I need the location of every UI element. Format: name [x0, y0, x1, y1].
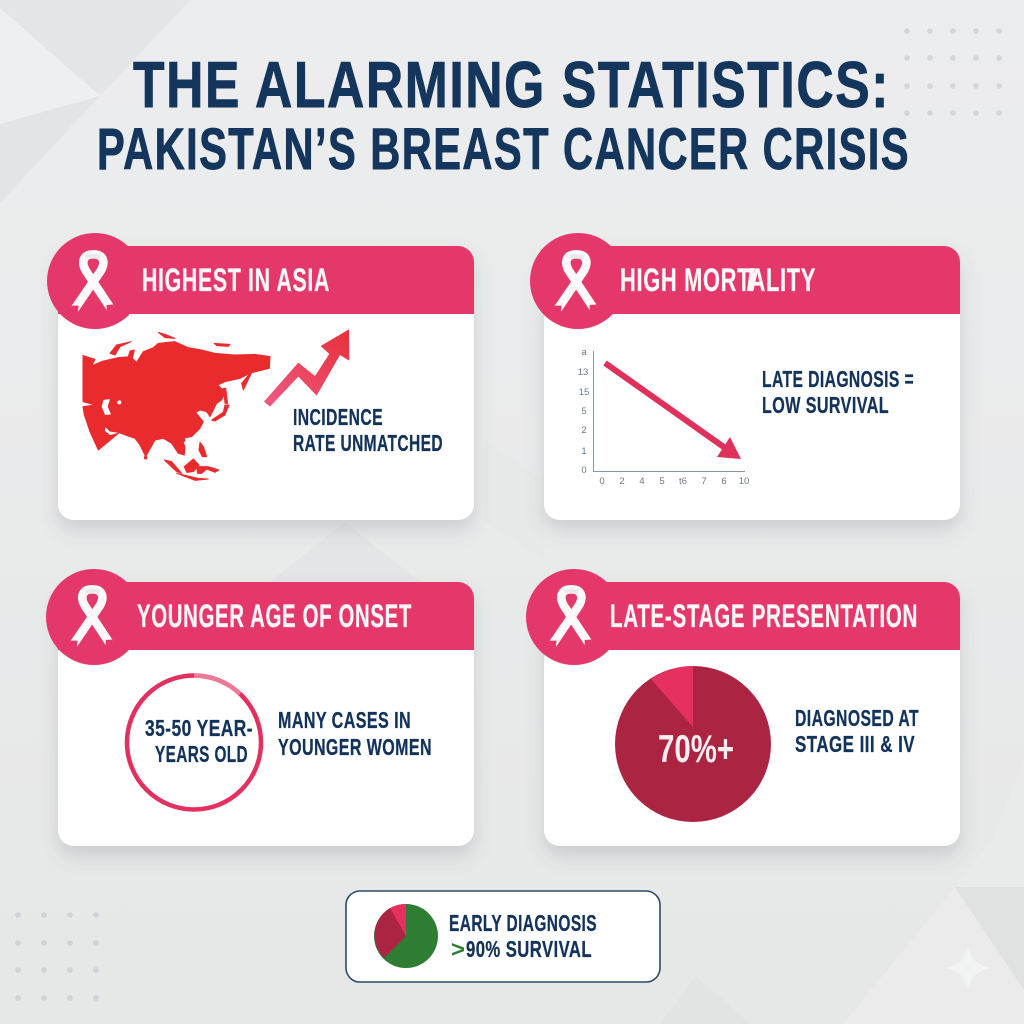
card body: [58, 582, 474, 846]
heading: [620, 262, 816, 298]
age ring: 35-50 YEAR-: [145, 715, 253, 741]
line chart: 5: [659, 476, 665, 487]
line chart: t6: [679, 476, 687, 487]
card body: [58, 246, 474, 520]
text: younger women: [278, 707, 432, 760]
callout text: >: [451, 936, 465, 962]
line chart: 1: [581, 446, 587, 457]
callout: early diagnosis: [346, 891, 660, 982]
text: younger women: MANY CASES IN: [278, 707, 411, 733]
text: late diagnosis: LOW SURVIVAL: [762, 392, 889, 418]
card header: [58, 582, 474, 650]
age ring: YEARS OLD: [155, 741, 248, 767]
text: incidence: [293, 404, 443, 456]
pie chart 70%: [615, 666, 771, 822]
age ring: [127, 676, 261, 810]
panel: younger age of onset: [46, 569, 474, 846]
card header: [58, 246, 474, 314]
badge with ribbon: [46, 569, 142, 665]
badge with ribbon: [530, 233, 626, 329]
text: younger women: YOUNGER WOMEN: [278, 734, 432, 760]
map of Asia: [83, 332, 270, 480]
pie chart 70%: 70%+: [658, 728, 734, 771]
text: stage: [795, 705, 919, 757]
rising arrow: [264, 329, 349, 407]
falling arrow: [605, 363, 741, 459]
callout text: [449, 910, 597, 962]
line chart: 2: [619, 476, 625, 487]
line chart: 2: [581, 425, 587, 436]
dots: top right: [904, 28, 1002, 116]
text: incidence: INCIDENCE: [293, 404, 383, 430]
text: incidence: RATE UNMATCHED: [293, 430, 443, 456]
line chart: 0: [599, 476, 605, 487]
card header: [544, 582, 960, 650]
line chart: 7: [701, 476, 707, 487]
panel: high mortality: [530, 233, 960, 520]
callout text: EARLY DIAGNOSIS: [449, 910, 597, 936]
sparkle: [944, 944, 992, 992]
badge with ribbon: [47, 233, 143, 329]
panel: highest in Asia: [47, 233, 474, 520]
heading: YOUNGER AGE OF ONSET: [137, 598, 412, 634]
line chart: 4: [639, 476, 645, 487]
mini pie chart: [374, 904, 438, 968]
line chart: 13: [578, 367, 588, 378]
line chart: 10: [739, 476, 749, 487]
heading: HIGHEST IN ASIA: [142, 262, 330, 298]
dots: bottom left: [15, 912, 99, 1001]
text: late diagnosis: LATE DIAGNOSIS =: [762, 366, 914, 392]
card body: [544, 582, 960, 846]
text: stage: STAGE III & IV: [795, 731, 915, 757]
badge with ribbon: [526, 569, 622, 665]
text: late diagnosis: [762, 366, 914, 418]
heading: HIGH MORTALITY: [620, 262, 816, 298]
panel: late-stage presentation: [526, 569, 960, 846]
title: [97, 48, 910, 182]
line chart: 0: [581, 465, 587, 476]
card body: [544, 246, 960, 520]
callout text: 90% SURVIVAL: [466, 936, 592, 962]
line chart: a: [581, 347, 587, 358]
line chart: 15: [579, 387, 589, 398]
card header: [544, 246, 960, 314]
line chart: 6: [721, 476, 727, 487]
line chart: [578, 347, 749, 487]
text: stage: DIAGNOSED AT: [795, 705, 919, 731]
line chart: 5: [581, 406, 587, 417]
